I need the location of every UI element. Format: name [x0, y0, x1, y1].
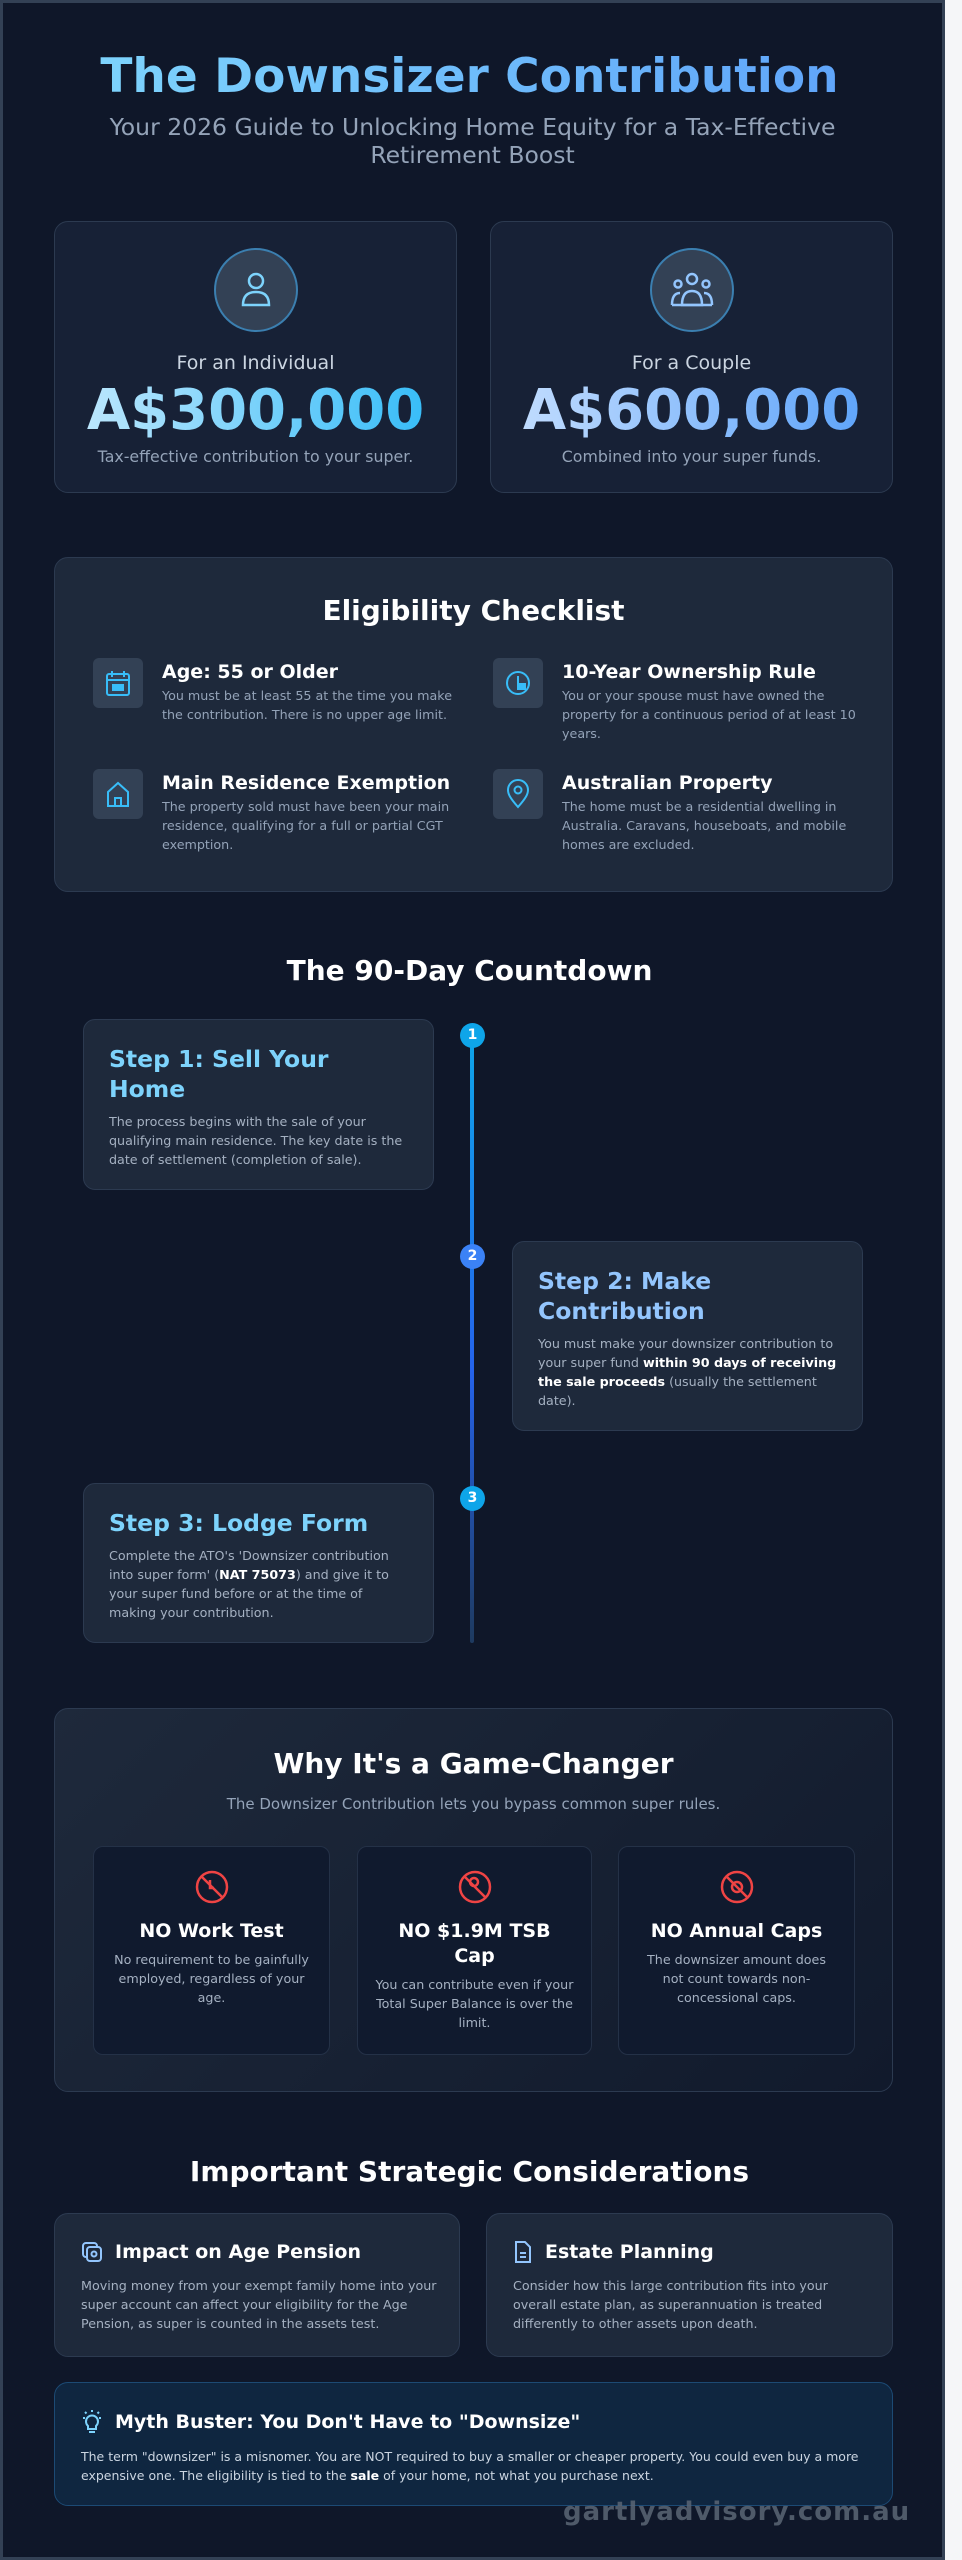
- marker 1: [460, 1023, 485, 1048]
- watermark: gartlyadvisory.com.au: [563, 2497, 910, 2527]
- amount: A$600,000: [523, 378, 860, 443]
- item: age: Age: 55 or Older: [162, 661, 338, 683]
- item: australian property: [493, 769, 846, 852]
- label: For an Individual: [176, 352, 334, 374]
- step 2 card: Step 2: Make Contribution: [538, 1267, 711, 1325]
- item: age: You must be at least 55 at the time you make the contribution. There is no upper age limit.: [162, 688, 452, 722]
- step 2 card: You must make your downsizer contribution to your super fund within 90 days of receiving the sale proceeds (usually the settlement date).: [538, 1336, 836, 1408]
- item: australian property: The home must be a residential dwelling in Australia. Caravans, houseboats, and mobile homes are excluded.: [562, 799, 846, 852]
- card: no work test: No requirement to be gainfully employed, regardless of your age.: [114, 1952, 309, 2005]
- step 2 card: [512, 1241, 863, 1431]
- item: main residence: Main Residence Exemption: [162, 772, 450, 794]
- icon: coins: [82, 2242, 102, 2262]
- marker 3: [460, 1486, 485, 1511]
- icon: calendar: [93, 658, 143, 708]
- timeline: [83, 1019, 863, 1643]
- subtitle: Your 2026 Guide to Unlocking Home Equity for a Tax-Effective Retirement Boost: [110, 113, 835, 169]
- card: no tsb cap: [357, 1846, 592, 2055]
- subheading: The Downsizer Contribution lets you bypass common super rules.: [227, 1795, 720, 1813]
- caption: Tax-effective contribution to your super.: [98, 447, 413, 466]
- item: age: [93, 658, 452, 722]
- heading: Eligibility Checklist: [322, 594, 625, 627]
- label: For a Couple: [632, 352, 751, 374]
- item: ownership: [493, 658, 856, 741]
- card: no tsb cap: NO $1.9M TSB Cap: [398, 1920, 551, 1967]
- panel: couple: [490, 221, 893, 493]
- marker 2: 2: [468, 1248, 477, 1264]
- icon: map pin: [493, 769, 543, 819]
- heading: Why It's a Game-Changer: [273, 1747, 674, 1780]
- icon: lightbulb: [83, 2410, 101, 2433]
- panel: eligibility checklist: [54, 557, 893, 892]
- callout: myth buster: [54, 2382, 893, 2506]
- item: australian property: Australian Property: [562, 772, 772, 794]
- step 3 card: Complete the ATO's 'Downsizer contribution into super form' (NAT 75073) and give it to your super fund before or at the time of making your contribution.: [109, 1548, 389, 1620]
- item: main residence: [93, 769, 450, 852]
- panel: game changer: [54, 1708, 893, 2092]
- step 1 card: The process begins with the sale of your qualifying main residence. The key date is the date of settlement (completion of sale).: [109, 1114, 402, 1167]
- callout: myth buster: The term "downsizer" is a misnomer. You are NOT required to buy a smaller or cheaper property. You could even buy a more expensive one. The eligibility is tied to the sale of your home, not what you purchase next.: [81, 2449, 858, 2483]
- card: no tsb cap: You can contribute even if your Total Super Balance is over the limit.: [376, 1977, 573, 2030]
- icon: group: [650, 248, 734, 332]
- panel: individual: [54, 221, 457, 493]
- line: [470, 1035, 474, 1643]
- step 3 card: Step 3: Lodge Form: [109, 1509, 368, 1537]
- heading: considerations: Important Strategic Considerations: [190, 2155, 749, 2188]
- card: no annual caps: NO Annual Caps: [651, 1920, 822, 1942]
- step 1 card: [83, 1019, 434, 1190]
- marker 3: 3: [468, 1490, 477, 1506]
- icon: document: [515, 2241, 531, 2263]
- card: estate planning: [486, 2213, 893, 2357]
- callout: myth buster: Myth Buster: You Don't Have to "Downsize": [115, 2411, 580, 2433]
- card: no annual caps: The downsizer amount does not count towards non-concessional caps.: [647, 1952, 826, 2005]
- card: no work test: NO Work Test: [139, 1920, 284, 1942]
- title: The Downsizer Contribution: [100, 49, 839, 104]
- card: no annual caps: [618, 1846, 855, 2055]
- caption: Combined into your super funds.: [562, 447, 821, 466]
- card: age pension: Moving money from your exempt family home into your super account can affect your eligibility for the Age Pension, as super is counted in the assets test.: [81, 2278, 436, 2331]
- heading: countdown: The 90-Day Countdown: [287, 954, 652, 987]
- icon: person: [214, 248, 298, 332]
- card: age pension: Impact on Age Pension: [115, 2241, 361, 2263]
- icon: banned: [458, 1870, 492, 1904]
- item: main residence: The property sold must have been your main residence, qualifying for a full or partial CGT exemption.: [162, 799, 449, 852]
- icon: banned: [196, 1870, 228, 1904]
- item: ownership: 10-Year Ownership Rule: [562, 661, 816, 683]
- item: ownership: You or your spouse must have owned the property for a continuous period of at least 10 years.: [562, 688, 856, 741]
- card: estate planning: Consider how this large contribution fits into your overall estate plan, as superannuation is treated differently to other assets upon death.: [513, 2278, 828, 2331]
- card: estate planning: Estate Planning: [545, 2241, 714, 2263]
- marker 2: [460, 1244, 485, 1269]
- step 3 card: [83, 1483, 434, 1643]
- icon: banned: [720, 1870, 754, 1904]
- icon: clock: [493, 658, 543, 708]
- card: age pension: [54, 2213, 460, 2357]
- icon: house: [93, 769, 143, 819]
- amount: A$300,000: [87, 378, 424, 443]
- marker 1: 1: [468, 1027, 477, 1043]
- card: no work test: [93, 1846, 330, 2055]
- step 1 card: Step 1: Sell Your Home: [109, 1045, 329, 1103]
